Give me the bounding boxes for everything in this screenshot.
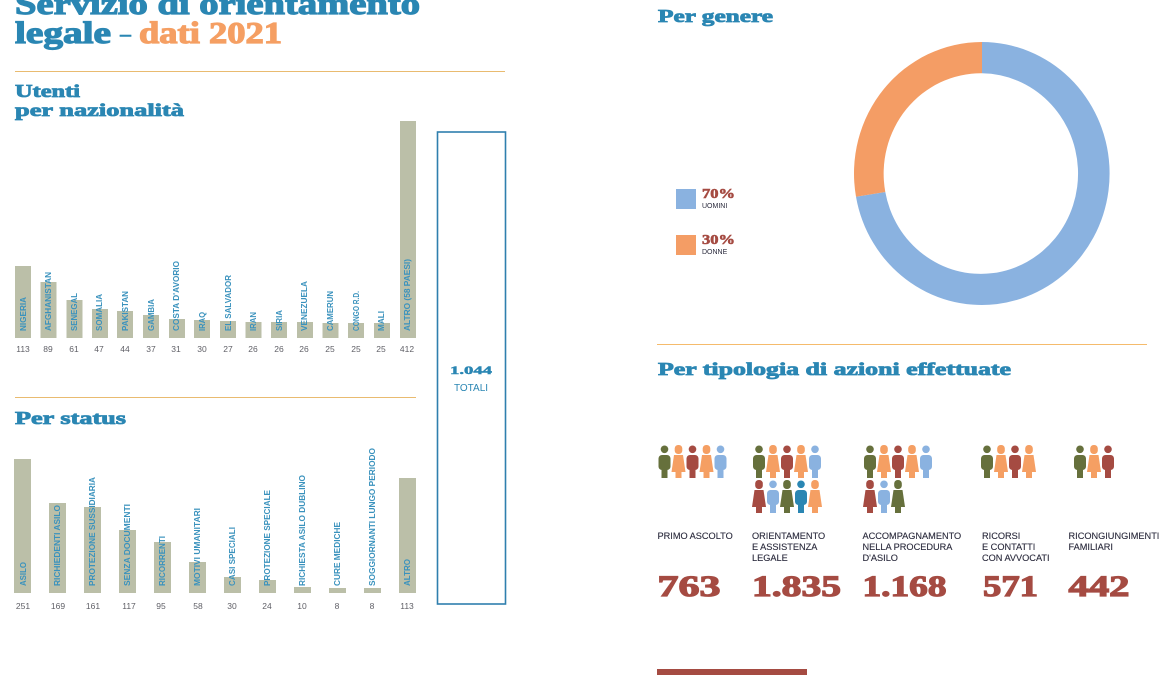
bar: Gambia 37: 37 xyxy=(146,344,156,354)
segment: donne 30% xyxy=(854,42,982,197)
donut chart: per genere xyxy=(854,42,1110,305)
bar: Afghanistan 89: 89 xyxy=(43,344,53,354)
legend item: donne xyxy=(676,233,735,256)
icon: people ricorsi xyxy=(981,445,1036,478)
bar: Gambia 37 xyxy=(143,299,159,354)
bar: Protezione speciale 24: PROTEZIONE SPECIALE xyxy=(262,490,272,586)
legend xyxy=(676,187,735,256)
bar: Mali 25 xyxy=(374,311,390,354)
bar: Ricorrenti 95: 95 xyxy=(156,601,166,611)
legend item: uomini: 70% xyxy=(702,187,735,202)
bar: Richiedenti asilo 169: RICHIEDENTI ASILO xyxy=(52,504,62,586)
bar: Afghanistan 89 xyxy=(40,272,56,354)
bar: Pakistan 44: 44 xyxy=(120,344,130,354)
totals box: TOTALI xyxy=(454,383,488,394)
bar: Siria 26 xyxy=(271,310,287,354)
bar: Richiedenti asilo 169 xyxy=(49,503,66,611)
bar: Congo R.D. 25 xyxy=(348,291,364,354)
bar: Cure mediche 8 xyxy=(329,522,346,611)
bar: Cure mediche 8: CURE MEDICHE xyxy=(332,522,342,586)
column: orientamento e assistenza legale: ORIENTAMENTO xyxy=(752,531,825,541)
bar: Nigeria 113: 113 xyxy=(16,344,30,354)
bar: Motivi umanitari 58: MOTIVI UMANITARI xyxy=(192,508,202,586)
bar: Congo R.D. 25: 25 xyxy=(351,344,361,354)
bar: Iran 26 xyxy=(246,312,262,354)
bar: Casi speciali 30: CASI SPECIALI xyxy=(227,527,237,586)
bar: Asilo 251 xyxy=(14,459,31,611)
bar: Motivi umanitari 58: 58 xyxy=(193,601,203,611)
bar: Casi speciali 30: 30 xyxy=(227,601,237,611)
bar: Iran 26: IRAN xyxy=(248,312,258,331)
legend item: uomini: UOMINI xyxy=(702,203,727,210)
bar: Siria 26: SIRIA xyxy=(274,310,284,331)
column: ricongiungimenti familiari: FAMILIARI xyxy=(1068,542,1113,552)
bar: Congo R.D. 25: CONGO R.D. xyxy=(351,291,361,331)
column: orientamento e assistenza legale: E ASSISTENZA xyxy=(752,542,818,552)
heading: per tipologia di azioni effettuate: Per tipologia di azioni effettuate xyxy=(658,359,1011,379)
bar: Motivi umanitari 58 xyxy=(189,508,206,611)
bar: Altro 113 xyxy=(399,478,416,611)
bar: Somalia 47: SOMALIA xyxy=(94,294,104,331)
column: ricorsi e contatti con avvocati: 571 xyxy=(983,570,1038,603)
bar: Mali 25: MALI xyxy=(376,311,386,331)
bar: Altro 113: 113 xyxy=(400,601,414,611)
icon: people orientamento xyxy=(752,445,822,513)
bar: El Salvador 27 xyxy=(220,275,236,354)
bar: Soggiornanti lungo periodo 8: SOGGIORNANTI LUNGO PERIODO xyxy=(367,447,377,586)
bar: Senegal 61 xyxy=(66,293,82,354)
bar: Venezuela 26: VENEZUELA xyxy=(299,281,309,331)
bar: Casi speciali 30 xyxy=(224,527,241,611)
bar: Richiedenti asilo 169: 169 xyxy=(51,601,65,611)
bar: Nigeria 113: NIGERIA xyxy=(18,297,28,331)
heading: per status: Per status xyxy=(15,408,126,428)
column: accompagnamento nella procedura d'asilo: 1.168 xyxy=(862,570,946,603)
heading: utenti per nazionalità: per nazionalità xyxy=(15,100,184,120)
bar: Iraq 30: 30 xyxy=(197,344,207,354)
bar: Afghanistan 89: AFGHANISTAN xyxy=(43,272,53,331)
bar: El Salvador 27: EL SALVADOR xyxy=(223,275,233,331)
segment: uomini 70% xyxy=(856,42,1110,305)
bar: Altro (58 paesi) 412: 412 xyxy=(400,344,414,354)
bar: Cure mediche 8: 8 xyxy=(335,601,340,611)
bar chart: per status xyxy=(14,447,416,611)
column: accompagnamento nella procedura d'asilo xyxy=(862,445,961,603)
heading: utenti per nazionalità: Utenti xyxy=(15,81,80,101)
column: primo ascolto: 763 xyxy=(658,570,720,603)
bar chart: utenti per nazionalità xyxy=(15,121,416,354)
bar: Siria 26: 26 xyxy=(274,344,284,354)
bar: Altro (58 paesi) 412: ALTRO (58 PAESI) xyxy=(402,259,412,331)
bar: Protezione sussidiaria 161 xyxy=(84,477,101,611)
bar: Somalia 47: 47 xyxy=(94,344,104,354)
bar: Nigeria 113 xyxy=(15,266,31,354)
bar: Richiesta asilo Dublino 10 xyxy=(294,474,311,611)
bar: Senegal 61: SENEGAL xyxy=(69,293,79,331)
column: ricorsi e contatti con avvocati xyxy=(981,445,1050,603)
bar: Altro (58 paesi) 412 xyxy=(400,121,416,354)
bar: Asilo 251: 251 xyxy=(16,601,30,611)
bar: Camerun 25 xyxy=(322,291,338,354)
bar: El Salvador 27: 27 xyxy=(223,344,233,354)
icon: people primo ascolto xyxy=(658,445,726,478)
bar: Asilo 251: ASILO xyxy=(18,561,28,586)
bar: Iraq 30: IRAQ xyxy=(197,312,207,331)
icon: people accompagnamento xyxy=(863,445,932,513)
bar: Venezuela 26: 26 xyxy=(299,344,309,354)
bar: Altro 113: ALTRO xyxy=(402,558,412,586)
title: – xyxy=(119,21,132,46)
bar: Gambia 37: GAMBIA xyxy=(146,299,156,331)
column: orientamento e assistenza legale: LEGALE xyxy=(752,553,788,563)
column: accompagnamento nella procedura d'asilo: NELLA PROCEDURA xyxy=(862,542,953,552)
bar: Costa d'Avorio 31: COSTA D'AVORIO xyxy=(171,260,181,331)
column: ricongiungimenti familiari xyxy=(1068,445,1159,603)
bar: Soggiornanti lungo periodo 8: 8 xyxy=(370,601,375,611)
legend item: donne: DONNE xyxy=(702,249,728,256)
bar: Venezuela 26 xyxy=(297,281,313,354)
bar: Protezione speciale 24: 24 xyxy=(262,601,272,611)
column: accompagnamento nella procedura d'asilo: ACCOMPAGNAMENTO xyxy=(862,531,961,541)
totals box: 1.044 xyxy=(450,363,492,377)
column: accompagnamento nella procedura d'asilo: D'ASILO xyxy=(862,553,898,563)
icon: people ricongiungimenti xyxy=(1074,445,1114,478)
column: primo ascolto: PRIMO ASCOLTO xyxy=(658,531,733,541)
bar: Senza documenti 117: 117 xyxy=(122,601,136,611)
bar: Costa d'Avorio 31: 31 xyxy=(171,344,181,354)
title: legale xyxy=(15,15,111,50)
column: ricorsi e contatti con avvocati: CON AVVOCATI xyxy=(982,553,1050,563)
bar: Senza documenti 117 xyxy=(119,504,136,611)
bar: Ricorrenti 95 xyxy=(154,536,171,611)
totals box xyxy=(438,132,506,604)
bar: Protezione sussidiaria 161: 161 xyxy=(86,601,100,611)
bar: Somalia 47 xyxy=(92,294,108,354)
bar: Camerun 25: 25 xyxy=(325,344,335,354)
bar: Protezione speciale 24 xyxy=(259,490,276,611)
bar: Richiesta asilo Dublino 10: 10 xyxy=(297,601,307,611)
legend item: uomini xyxy=(676,187,735,210)
heading: utenti per nazionalità xyxy=(15,81,184,120)
column: ricorsi e contatti con avvocati: RICORSI xyxy=(982,531,1020,541)
bar: Iran 26: 26 xyxy=(248,344,258,354)
legend item: donne: 30% xyxy=(702,233,735,248)
column: ricongiungimenti familiari: 442 xyxy=(1068,570,1130,603)
title: dati 2021 xyxy=(139,15,282,50)
column: ricongiungimenti familiari: RICONGIUNGIMENTI xyxy=(1068,531,1159,541)
column: orientamento e assistenza legale xyxy=(752,445,841,603)
column: primo ascolto xyxy=(658,445,733,603)
bar: Ricorrenti 95: RICORRENTI xyxy=(157,536,167,586)
bar: Pakistan 44 xyxy=(117,291,133,354)
bar: Pakistan 44: PAKISTAN xyxy=(120,291,130,331)
bar: Costa d'Avorio 31 xyxy=(169,260,185,354)
heading: per genere: Per genere xyxy=(658,6,773,26)
title xyxy=(15,0,420,50)
column: orientamento e assistenza legale: 1.835 xyxy=(752,570,841,603)
bar: Iraq 30 xyxy=(194,312,210,354)
bar: Senza documenti 117: SENZA DOCUMENTI xyxy=(122,504,132,586)
bar: Protezione sussidiaria 161: PROTEZIONE SUSSIDIARIA xyxy=(87,477,97,586)
bar: Senegal 61: 61 xyxy=(69,344,79,354)
bar: Richiesta asilo Dublino 10: RICHIESTA ASILO DUBLINO xyxy=(297,474,307,586)
bar: Mali 25: 25 xyxy=(376,344,386,354)
column: ricorsi e contatti con avvocati: E CONTATTI xyxy=(982,542,1035,552)
bar: Camerun 25: CAMERUN xyxy=(325,291,335,331)
bar: Soggiornanti lungo periodo 8 xyxy=(364,447,381,611)
